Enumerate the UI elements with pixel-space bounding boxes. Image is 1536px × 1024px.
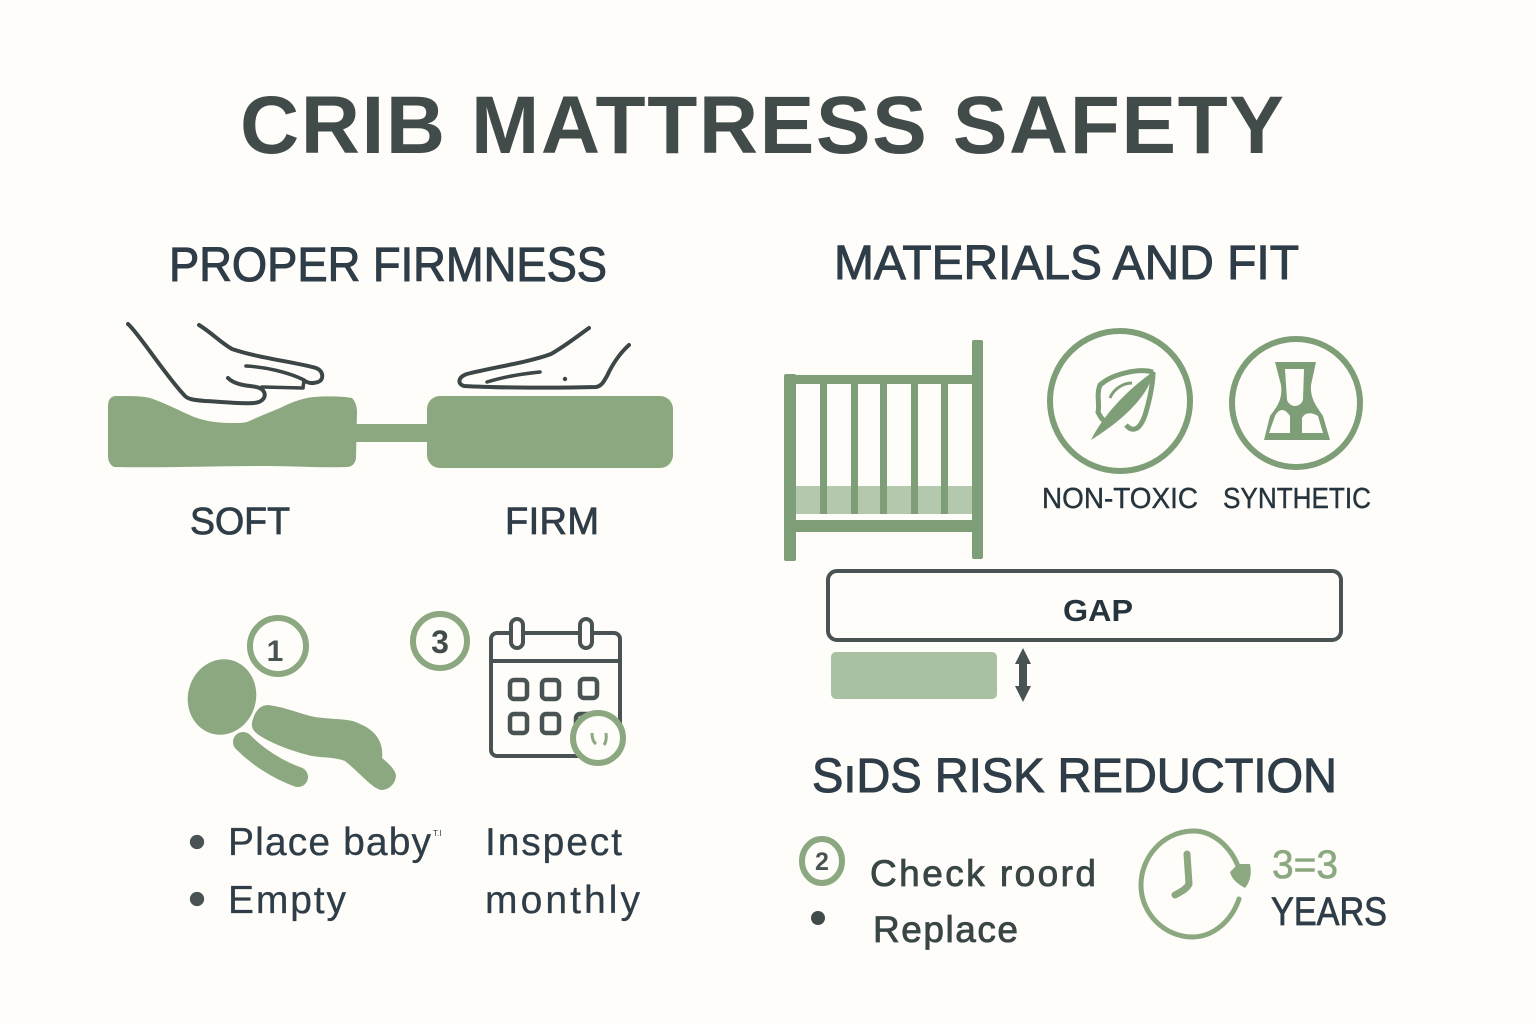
label: soft: SOFT (190, 501, 290, 543)
text: check roord: Check roord (870, 853, 1096, 894)
text: inspect monthly: Inspect (485, 821, 622, 864)
list: baby tips: Empty (228, 879, 346, 922)
icon: hand pressing soft mattress (128, 324, 322, 403)
gap box (828, 571, 1341, 640)
list: baby tips: T.I (433, 829, 441, 838)
icon: non-toxic leaf (1050, 331, 1190, 471)
list: baby tips (190, 821, 441, 922)
panel: materials and fit (784, 237, 1371, 702)
connector between mattresses (355, 424, 430, 442)
panel: sids risk reduction (802, 750, 1387, 950)
label: firm: FIRM (505, 501, 599, 543)
list: baby tips: Place baby (228, 821, 432, 864)
text: inspect monthly: monthly (485, 879, 640, 922)
icon: sleeping baby (179, 651, 396, 790)
badge: number 3 (413, 614, 467, 668)
icon: synthetic flask (1232, 339, 1360, 467)
badge: number 3: 3 (431, 624, 449, 660)
heading: sids risk reduction: SıDS RISK REDUCTION (812, 750, 1337, 803)
gap box: GAP (1063, 593, 1133, 628)
label: years: YEARS (1271, 890, 1387, 934)
text: replace: Replace (873, 909, 1018, 950)
label: synthetic: SYNTHETIC (1223, 483, 1371, 515)
title: CRIB MATTRESS SAFETY (240, 80, 1284, 171)
heading: materials and fit: MATERIALS AND FIT (834, 237, 1299, 290)
bullet (811, 911, 825, 925)
mattress sample (831, 652, 997, 699)
badge: number 1 (250, 618, 306, 674)
icon: calendar (491, 619, 620, 756)
heading: proper firmness: PROPER FIRMNESS (169, 239, 607, 292)
icon: hand pressing firm mattress (459, 328, 629, 388)
badge: calendar check (573, 713, 623, 763)
badge: number 1: 1 (267, 635, 283, 668)
badge: number 2 (802, 839, 842, 883)
icon: clock (1141, 831, 1251, 937)
firm mattress (427, 396, 673, 468)
panel: proper firmness (108, 239, 673, 543)
soft mattress (108, 396, 357, 467)
text: inspect monthly (485, 821, 640, 922)
arrow: gap measurement (1015, 648, 1031, 702)
badge: number 2: 2 (815, 848, 829, 876)
label: non-toxic: NON-TOXIC (1042, 483, 1198, 515)
label: 3=3: 3=3 (1272, 843, 1338, 887)
icon: crib (784, 340, 983, 561)
